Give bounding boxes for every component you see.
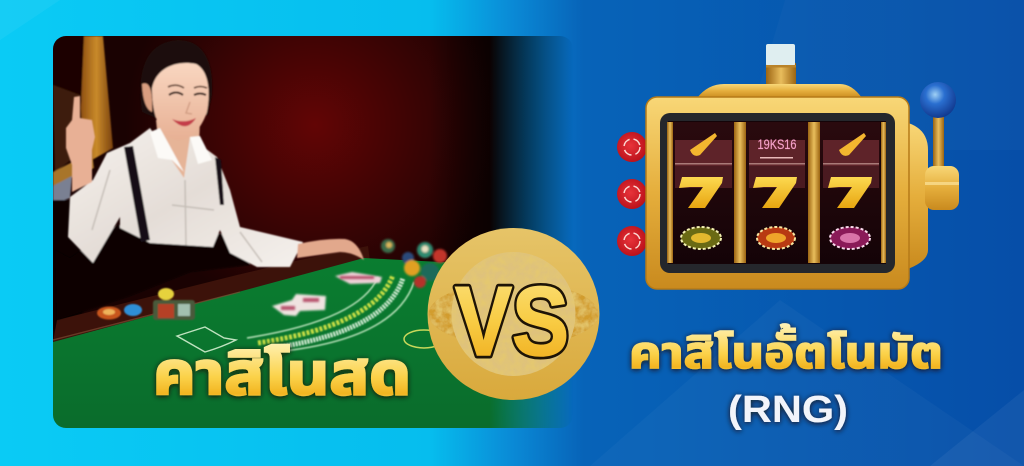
subheading: RNG: (RNG): [728, 389, 848, 431]
machine body: [646, 97, 909, 289]
coin inner texture: [452, 252, 576, 376]
hair: [140, 40, 212, 120]
cards: [272, 272, 382, 316]
suspenders: [124, 146, 224, 242]
screen: [660, 113, 895, 273]
raised hand: [66, 96, 95, 192]
top stem and cap: [697, 44, 862, 98]
panel title: คาสิโนสด: [153, 340, 411, 407]
VS coin: [428, 228, 600, 400]
dealer: [55, 40, 364, 320]
table: [53, 239, 575, 430]
table arcs: [247, 275, 414, 352]
face: [150, 62, 210, 127]
reel 2: [746, 122, 808, 263]
reel 2: 19KS16: [758, 136, 797, 152]
wall backdrop: [53, 36, 524, 342]
chips left: [97, 288, 195, 320]
resting hand: [297, 239, 364, 260]
shirt folds: [92, 170, 262, 262]
VS text: VS: [455, 266, 569, 376]
VS outline: VS: [455, 266, 569, 376]
heading: automatic casino: คาสิโนอั้ตโนมัต: [629, 324, 943, 378]
neck: [156, 120, 200, 188]
reel 1: [673, 122, 734, 263]
gold curtain: [53, 36, 113, 330]
betting box: [177, 327, 236, 352]
right title: [629, 324, 943, 431]
reel dividers: [667, 122, 886, 263]
reel 3: [820, 122, 880, 263]
coin disc: [428, 228, 600, 400]
icon: slot machine: [617, 44, 959, 289]
skirt and apron: [55, 225, 250, 320]
panel: live casino photo: [53, 36, 575, 430]
lever: [905, 82, 959, 270]
red buttons: [617, 132, 647, 256]
chips right: [381, 239, 447, 288]
shirt: [68, 128, 303, 267]
gold ring: [403, 329, 434, 349]
collar: [150, 128, 212, 172]
coin texture band: [428, 282, 598, 346]
